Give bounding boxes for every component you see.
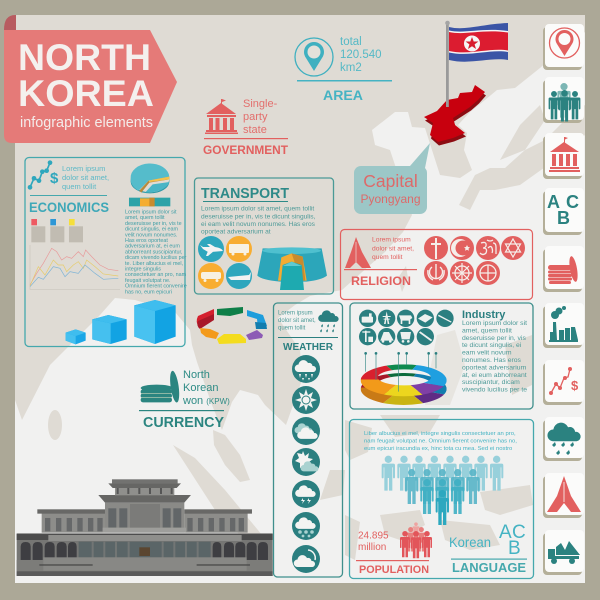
economics text: Omnium fierent convenire [125, 284, 187, 290]
area block [295, 36, 392, 103]
title banner [4, 15, 177, 143]
economics text: dicunt singulis, ei eam [125, 227, 179, 233]
panel: industry [349, 302, 534, 410]
panel: population and language: Korean [449, 534, 491, 550]
currency block: North [183, 369, 210, 381]
pie chart [129, 163, 170, 206]
currency block [139, 369, 230, 431]
economics text: feugait volutpat ne. [125, 278, 171, 284]
panel: industry: eam velit novum [462, 350, 512, 357]
panel: population and language: LANGUAGE [452, 560, 526, 575]
map: north korea highlighted [424, 85, 486, 146]
panel: population and language: nam feugait volutpat ne. Omnium fierent convenire has no, [364, 438, 517, 444]
icon: location pin [295, 38, 333, 76]
panel: weather: Lorem ipsum [278, 310, 313, 316]
icon: people group [400, 522, 432, 558]
icon: dharma wheel [450, 261, 474, 285]
icon: ship [226, 263, 252, 289]
icon: sun [292, 386, 320, 414]
panel: industry: te dicunt singulis, ei [462, 342, 522, 349]
panel: economics: dolor sit amet, [62, 173, 109, 182]
tile: language: B [557, 208, 570, 228]
panel: transport: Lorem ipsum dolor sit amet, quem tollit [201, 206, 314, 212]
panel: industry: deseruisse per in, vis [462, 335, 526, 342]
tile: language: C [566, 192, 579, 212]
panel: economics: Lorem ipsum [62, 164, 105, 173]
tile: transport [543, 530, 584, 575]
panel: economics: quem tollit [62, 182, 97, 191]
line chart [30, 219, 120, 289]
tile: economics [543, 360, 584, 405]
economics text: adversarium at, ei eum [125, 244, 180, 250]
sidebar icons [543, 24, 584, 575]
industry icons [359, 310, 454, 345]
icon: sun behind cloud [292, 448, 320, 476]
title banner: infographic elements [20, 115, 153, 131]
economics text: Lorem ipsum dolor sit [125, 210, 177, 216]
panel: population and language [350, 420, 534, 578]
panel: population and language: eum epicuri iracundia ex, hinc tota cu mea. Sed ei nostro [364, 446, 513, 452]
currency block: CURRENCY [143, 415, 224, 431]
government block: Single- [243, 98, 278, 110]
government block [203, 98, 289, 157]
panel: economics: $ [50, 170, 59, 187]
color ring segments [197, 307, 267, 344]
panel: weather [274, 303, 342, 577]
icon: growth line with dollar [28, 160, 52, 190]
icon: cloud at night [292, 545, 320, 573]
mausoleum building [17, 479, 273, 576]
panel: weather: WEATHER [283, 342, 333, 353]
panel: industry: suscipiantur, dicam [462, 379, 520, 386]
economics text: integre singulis [125, 266, 161, 272]
government block: state [243, 124, 267, 136]
tile: currency [543, 246, 584, 292]
economics text: dicam vivendo lucilius per [125, 255, 187, 261]
tile: people [543, 77, 584, 123]
bar chart: blue cubes [66, 300, 176, 344]
currency block: Korean [183, 382, 218, 394]
icon: bus [226, 236, 252, 262]
panel: population and language: B [508, 538, 521, 559]
panel: weather: dolor sit amet, [278, 318, 316, 324]
tile: industry [543, 303, 584, 348]
panel: transport: ei eam velit novum nonumes. Has eros [201, 221, 316, 228]
economics text: amet, quem tollit [125, 215, 165, 221]
tile: economics: $ [571, 378, 579, 393]
panel: industry: vivendo lucilius per te [462, 387, 527, 394]
economics text: has no, eum epicuri [125, 289, 172, 295]
panel: religion: Lorem ipsum [372, 236, 411, 244]
capital callout: Pyongyang [360, 192, 421, 206]
icon: star of david [501, 236, 525, 260]
economics text: te. Liber albucius ei mel, [125, 261, 184, 267]
area block: km2 [340, 62, 362, 74]
economics text: velit novum nonumes. [125, 232, 177, 238]
flag [445, 21, 508, 107]
economics text: consectetuer an pro, nam [125, 272, 187, 278]
panel: industry: Industry [462, 309, 506, 321]
icon: khanda [424, 261, 448, 285]
panel: industry: Lorem ipsum dolor sit [462, 320, 527, 327]
tile: language: A [547, 192, 560, 212]
pictogram: people crowd [382, 456, 503, 525]
3d ring segment [257, 247, 327, 290]
area block: 120.540 [340, 49, 382, 61]
area block: total [340, 36, 362, 48]
economics text: abhorreant suscipiantur, [125, 249, 183, 255]
economics text: deseruisse per in, vis te [125, 221, 182, 227]
panel: industry: oporteat adversarium [462, 364, 527, 371]
icon: snow [292, 512, 320, 540]
icon: cross [424, 236, 448, 260]
panel: religion: quem tollit [372, 254, 403, 261]
panel: population and language: Liber albucius ei mel, integre singulis consectetuer an pro, [364, 431, 516, 437]
panel: religion: dolor sit amet, [372, 246, 414, 252]
icon: coins [141, 370, 181, 403]
capital callout: Capital [363, 171, 418, 191]
icon: cloudy [292, 417, 320, 445]
panel: economics: ECONOMICS [29, 200, 109, 215]
panel: weather: quem tollit [278, 326, 306, 332]
panel: religion [340, 230, 532, 300]
capital callout [354, 143, 430, 214]
icon: wheel cross [476, 261, 500, 285]
title banner: NORTH [18, 36, 151, 78]
icon: crescent [450, 236, 474, 260]
donut chart [360, 352, 447, 405]
icon: praying hands [345, 237, 371, 268]
tile: location [543, 24, 584, 70]
panel: transport [194, 178, 334, 294]
area block: AREA [323, 87, 363, 103]
economics text [125, 210, 187, 295]
panel: population and language: million [358, 542, 386, 553]
panel: population and language: 24.895 [358, 530, 389, 542]
tile: religion [543, 473, 584, 518]
government block: party [243, 111, 268, 123]
icon: government building [205, 99, 238, 134]
tile: weather [543, 417, 584, 461]
panel: economics [25, 158, 187, 346]
panel: transport: deseruisse per in, vis te dicunt singulis, [201, 213, 316, 220]
icon: airplane [198, 236, 224, 262]
panel: industry: amet, quem tollit [462, 327, 512, 334]
currency block: won (KPW) [182, 395, 230, 407]
panel: religion: RELIGION [351, 274, 411, 288]
icon: rain cloud [318, 310, 339, 332]
panel: population and language: POPULATION [359, 564, 429, 576]
tile: language [543, 188, 584, 235]
economics text: Has eros oporteat [125, 238, 168, 244]
panel: population and language: A [499, 522, 512, 543]
title banner: KOREA [18, 72, 154, 114]
tile: government [543, 133, 584, 179]
icon: tanker truck [198, 263, 224, 289]
icon: rain [292, 355, 320, 383]
icon: thunderstorm [292, 480, 320, 508]
panel: transport: TRANSPORT [201, 185, 290, 202]
panel: industry: nonumes. Has eros [462, 357, 522, 364]
government block: GOVERNMENT [203, 143, 289, 157]
icon: om [476, 236, 500, 260]
panel: transport: oporteat adversarium at [201, 228, 271, 236]
panel: industry: at, ei eum abhorreant [462, 372, 527, 379]
panel: population and language: C [512, 522, 526, 543]
